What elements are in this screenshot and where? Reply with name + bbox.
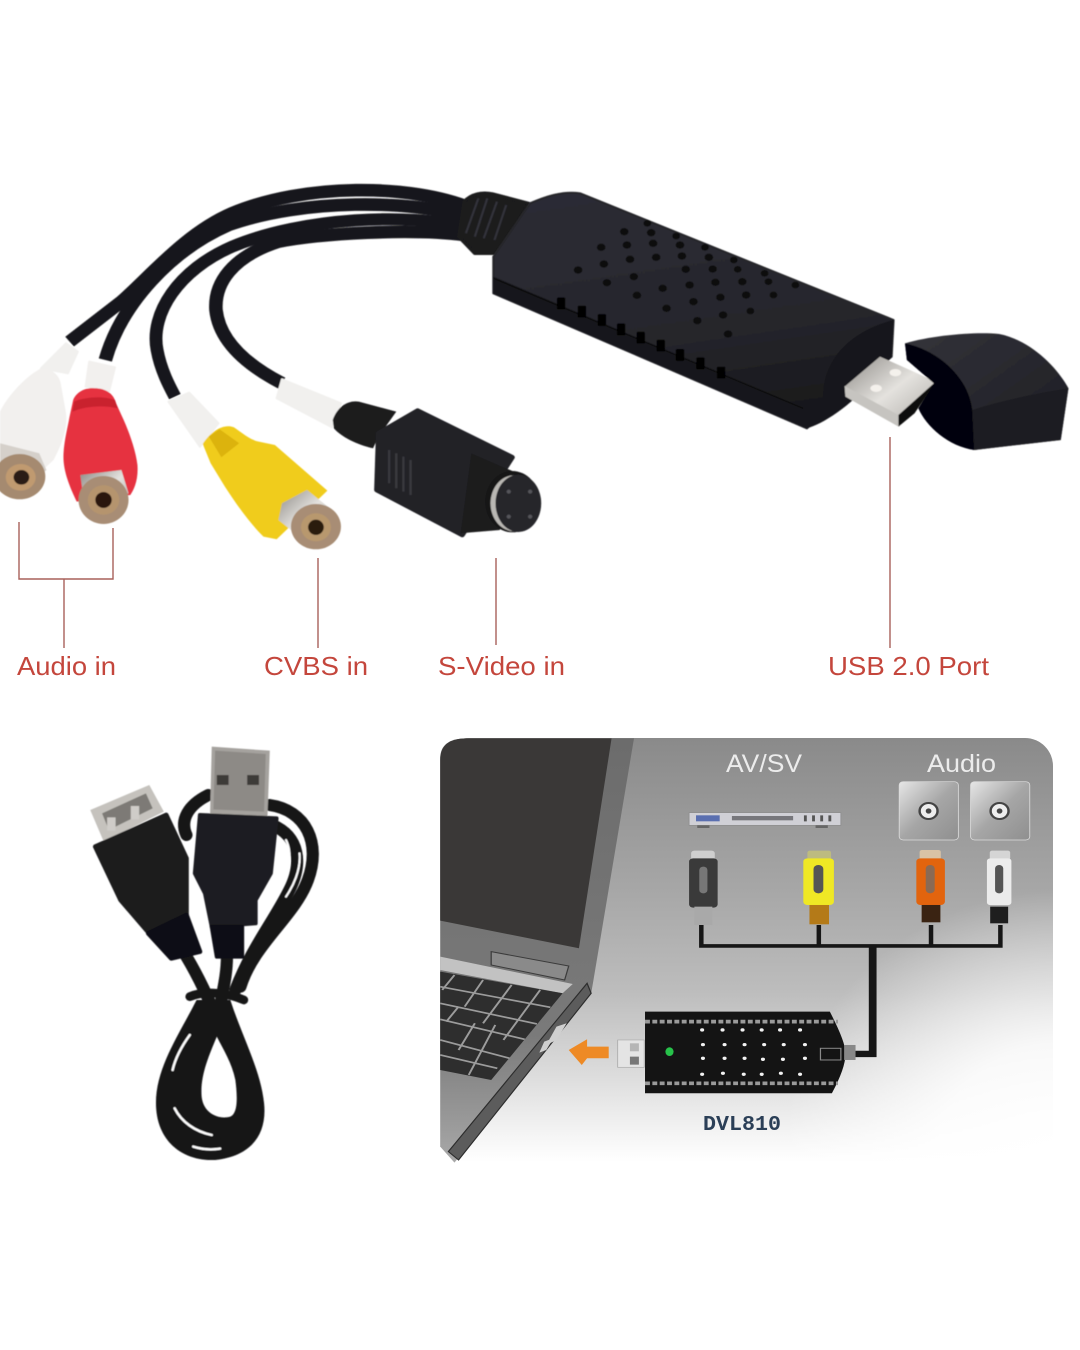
main adapter photo xyxy=(0,190,1068,549)
vent holes xyxy=(574,220,799,338)
capture device xyxy=(618,1012,856,1093)
heading: Audio: Audio xyxy=(927,750,996,778)
protective cap xyxy=(905,333,1068,450)
orange plug xyxy=(916,850,945,922)
S-Video plug xyxy=(689,851,718,925)
cable strain relief xyxy=(459,193,528,253)
audio wall sockets xyxy=(899,782,1030,840)
model name: DVL810 xyxy=(703,1114,781,1137)
orange arrow xyxy=(569,1039,609,1065)
cables xyxy=(70,190,471,397)
wiring xyxy=(701,925,1000,1054)
label: S-Video in: S-Video in xyxy=(438,651,565,681)
label: Audio in: Audio in xyxy=(17,651,116,681)
coiled cable xyxy=(156,795,313,1160)
panel background xyxy=(441,738,1053,1162)
male USB connector xyxy=(195,747,277,957)
yellow plug xyxy=(803,851,834,924)
red RCA connector xyxy=(63,362,138,524)
USB extension cable photo xyxy=(90,747,313,1160)
USB plug xyxy=(845,357,936,427)
heading: AV/SV: AV/SV xyxy=(726,750,802,778)
label: CVBS in: CVBS in xyxy=(264,651,368,681)
S-Video connector xyxy=(277,379,541,535)
callout lines xyxy=(19,437,890,648)
USB adapter body xyxy=(493,193,1068,450)
connection diagram panel xyxy=(440,738,1053,1163)
DVD player xyxy=(689,813,841,828)
female USB connector xyxy=(90,785,200,958)
yellow RCA connector xyxy=(169,393,341,549)
label: USB 2.0 Port: USB 2.0 Port xyxy=(828,651,990,681)
laptop xyxy=(440,738,1030,1163)
cables and connectors xyxy=(0,190,541,549)
side slots xyxy=(557,297,725,379)
white RCA connector xyxy=(0,343,78,499)
white plug xyxy=(987,851,1011,923)
